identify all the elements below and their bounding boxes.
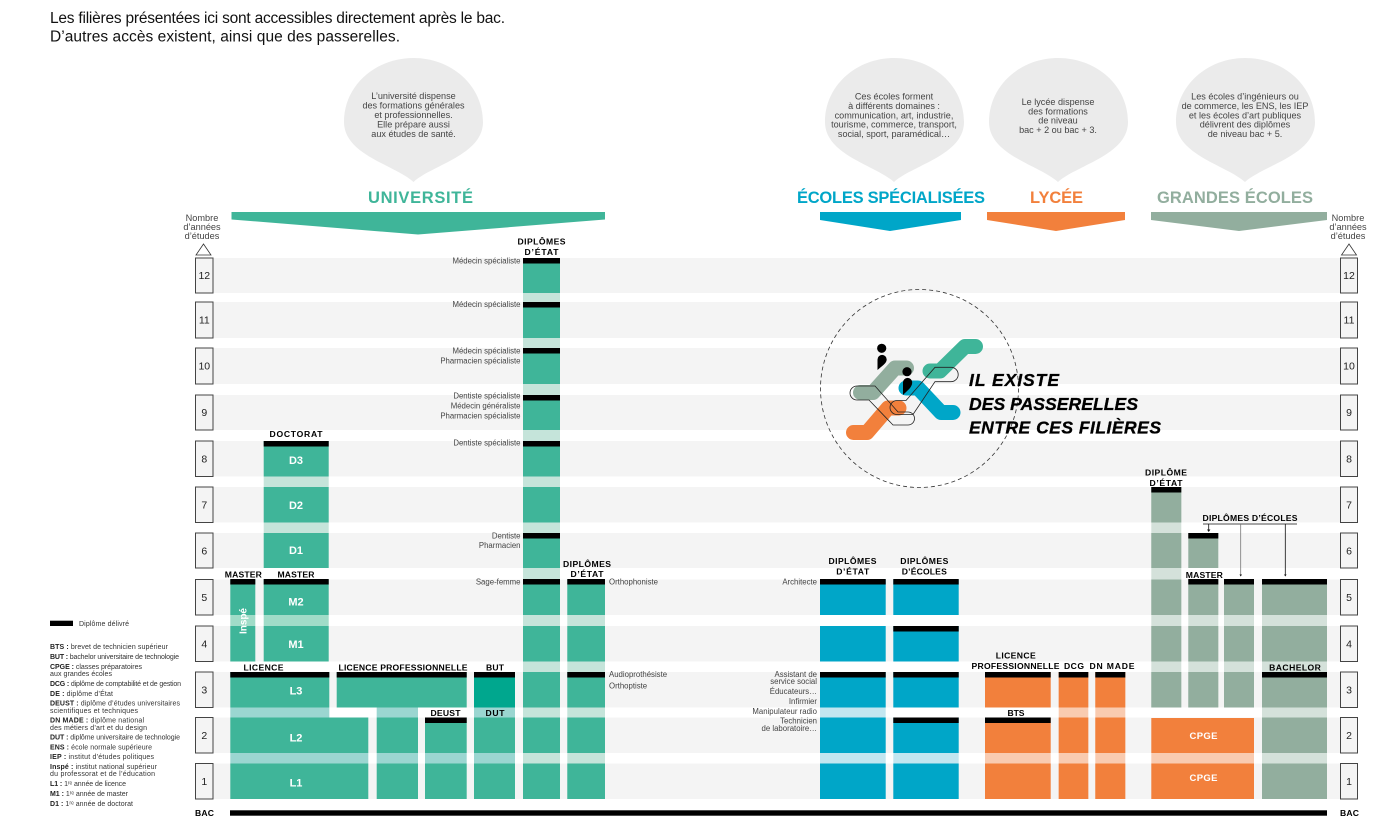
- heading: lycée: LYCÉE: [1030, 188, 1083, 207]
- bubble: université: [344, 58, 483, 182]
- column: diplômes d'État santé: Sage-femme: [476, 578, 520, 586]
- column: diplômes d'État santé: Pharmacien spécialiste: [440, 412, 520, 420]
- column: écoles spécialisées diplômes d'État: Éducateurs…: [770, 687, 817, 696]
- column: Inspé master: [225, 570, 263, 662]
- column: diplômes d'État paramédicaux: [563, 558, 667, 799]
- bubble: lycée: de niveau: [1038, 116, 1078, 126]
- bubble: écoles spécialisées: communication, art, industrie,: [835, 110, 953, 120]
- legend: aux grandes écoles: [50, 671, 112, 678]
- bubble: écoles spécialisées: à différents domaines :: [848, 101, 940, 111]
- left axis: number of years: 2: [201, 730, 207, 742]
- callout text: ENTRE CES FILIÈRES: [969, 416, 1161, 438]
- column: CPGE: CPGE: [1190, 731, 1218, 742]
- right axis: number of years: 9: [1346, 407, 1352, 419]
- column: master and doctorat: MASTER: [278, 570, 315, 580]
- column: diplômes d'État santé: Dentiste spécialiste: [453, 438, 520, 448]
- column: licence: L3: [290, 686, 302, 698]
- legend: DE : diplôme d’État: [50, 689, 113, 698]
- column: grandes écoles diplôme d'école: [1224, 579, 1254, 708]
- column: grandes écoles bachelor: [1262, 579, 1327, 799]
- legend: Inspé : institut national supérieur: [50, 764, 158, 771]
- column: master and doctorat: M2: [288, 596, 304, 608]
- column: BUT and DUT: DUT: [486, 708, 505, 718]
- heading: grandes écoles: GRANDES ÉCOLES: [1157, 188, 1313, 207]
- column: master and doctorat: M1: [288, 639, 304, 651]
- left axis: number of years: 1: [201, 776, 207, 788]
- column: lycée DN MADE: DN MADE: [1090, 661, 1135, 671]
- right axis: number of years: d’années: [1329, 222, 1367, 232]
- column: licence: LICENCE: [244, 662, 284, 672]
- bubble: grandes écoles: délivrent des diplômes: [1200, 120, 1291, 130]
- right axis: number of years: 7: [1346, 500, 1352, 512]
- column: DEUST: [425, 708, 467, 799]
- left axis: number of years: 6: [201, 546, 207, 558]
- legend: L1 : 1ʳᵉ année de licence: [50, 781, 126, 788]
- column: écoles spécialisées diplômes d'État: [752, 555, 886, 799]
- right axis: number of years: 12: [1343, 270, 1355, 282]
- legend: DEUST : diplôme d’études universitaires: [50, 700, 180, 708]
- column: grandes écoles master: [1186, 533, 1224, 708]
- column: master and doctorat: DOCTORAT: [270, 429, 323, 439]
- bubble: grandes écoles: et les écoles d’art publiques: [1189, 110, 1302, 120]
- column: diplômes d'État paramédicaux: Audioprothésiste: [609, 670, 667, 679]
- right axis: number of years: 10: [1343, 360, 1355, 372]
- column: lycée DCG: DCG: [1064, 661, 1084, 671]
- column: diplômes d'État santé: Médecin spécialiste: [452, 256, 520, 266]
- intro text: D’autres accès existent, ainsi que des passerelles.: [50, 28, 400, 46]
- column: écoles spécialisées diplômes d'État: de laboratoire…: [762, 724, 817, 733]
- legend: du professorat et de l’éducation: [50, 771, 155, 778]
- bubble: université: Elle prépare aussi: [377, 120, 450, 130]
- left axis: number of years: Nombre: [186, 213, 218, 223]
- bubble: écoles spécialisées: Ces écoles forment: [855, 92, 934, 102]
- column: licence: L2: [290, 733, 302, 745]
- column: écoles spécialisées diplômes d'écoles: DIPLÔMES: [900, 555, 949, 566]
- column: écoles spécialisées diplômes d'État: Technicien: [780, 716, 817, 726]
- right axis: number of years: [1329, 213, 1367, 799]
- legend: ENS : école normale supérieure: [50, 744, 152, 752]
- icon: crossing walkways: [850, 344, 976, 432]
- heading: grandes écoles: [1151, 188, 1327, 231]
- right axis: number of years: 1: [1346, 776, 1352, 788]
- column: diplômes d'État paramédicaux: D’ÉTAT: [570, 569, 604, 579]
- column: écoles spécialisées diplômes d'État: Manipulateur radio: [752, 707, 818, 716]
- legend: scientifiques et techniques: [50, 708, 138, 715]
- bubble: grandes écoles: de niveau bac + 5.: [1208, 129, 1282, 139]
- intro text: Les filières présentées ici sont accessibles directement après le bac.: [50, 10, 505, 27]
- legend: Diplôme délivré: [79, 621, 129, 628]
- column: BUT and DUT: BUT: [486, 662, 505, 672]
- column: licence professionnelle: [337, 662, 468, 799]
- column: grandes écoles master: MASTER: [1186, 570, 1224, 580]
- column: lycée BTS and licence professionnelle: BTS: [1008, 708, 1025, 718]
- BAC baseline: [195, 808, 1359, 818]
- callout: passerelles: [820, 290, 1161, 488]
- BAC baseline: BAC: [195, 808, 214, 818]
- column: diplômes d'État paramédicaux: Orthophoniste: [609, 578, 658, 586]
- heading: écoles spécialisées: ÉCOLES SPÉCIALISÉES: [797, 188, 985, 207]
- legend: BUT : bachelor universitaire de technologie: [50, 654, 179, 661]
- right axis: number of years: 2: [1346, 730, 1352, 742]
- legend: des métiers d’art et du design: [50, 725, 147, 732]
- right axis: number of years: 3: [1346, 684, 1352, 696]
- legend: CPGE : classes préparatoires: [50, 664, 142, 671]
- column: CPGE: CPGE: [1190, 773, 1218, 784]
- column: DEUST: DEUST: [430, 708, 461, 718]
- left axis: number of years: 3: [201, 684, 207, 696]
- bubble: grandes écoles: Les écoles d’ingénieurs ou: [1191, 92, 1299, 102]
- column: diplômes d'État santé: Médecin spécialiste: [452, 300, 520, 309]
- bubble: lycée: Le lycée dispense: [1022, 97, 1094, 107]
- BAC baseline: BAC: [1340, 808, 1359, 818]
- column: master and doctorat: D1: [289, 545, 303, 557]
- heading: lycée: [987, 188, 1125, 231]
- column: diplômes d'État santé: Dentiste spécialiste: [453, 392, 520, 400]
- left axis: number of years: 7: [201, 500, 207, 512]
- right axis: number of years: 8: [1346, 454, 1352, 466]
- column: CPGE: [1151, 718, 1254, 799]
- right axis: number of years: d’études: [1331, 231, 1366, 241]
- callout text: IL EXISTE: [969, 370, 1060, 390]
- left axis: number of years: [183, 213, 221, 799]
- right axis: number of years: Nombre: [1332, 213, 1364, 223]
- background year rows: [213, 258, 1341, 799]
- column: Inspé master: MASTER: [225, 570, 263, 580]
- bubble: lycée: [989, 58, 1128, 182]
- column: master and doctorat: [264, 429, 329, 662]
- bubble: université: des formations générales: [362, 100, 465, 110]
- column: grandes écoles bachelor: BACHELOR: [1269, 662, 1322, 672]
- column: lycée BTS and licence professionnelle: PROFESSIONNELLE: [972, 661, 1060, 671]
- callout text: [969, 370, 1161, 438]
- label: diplômes d'écoles with leader lines: [1202, 512, 1298, 576]
- column: diplômes d'État santé: Dentiste: [492, 532, 520, 540]
- legend: BTS : brevet de technicien supérieur: [50, 644, 169, 651]
- column: diplômes d'État santé: DIPLÔMES: [518, 236, 566, 246]
- heading: université: [232, 188, 605, 234]
- left axis: number of years: d’années: [183, 222, 221, 232]
- column: diplômes d'État paramédicaux: Orthoptiste: [609, 682, 647, 690]
- column: écoles spécialisées diplômes d'État: DIPLÔMES: [828, 555, 877, 566]
- column: grandes écoles diplôme d'État: DIPLÔME: [1145, 466, 1187, 478]
- left axis: number of years: 12: [198, 270, 210, 282]
- bubble: écoles spécialisées: [825, 58, 964, 182]
- column: lycée BTS and licence professionnelle: [972, 650, 1060, 799]
- column: diplômes d'État santé: Pharmacien spécialiste: [440, 356, 520, 366]
- heading: université: UNIVERSITÉ: [368, 188, 473, 207]
- legend: [50, 621, 181, 808]
- column: lycée DN MADE: [1090, 661, 1135, 799]
- left axis: number of years: d’études: [185, 231, 220, 241]
- bubble: écoles spécialisées: social, sport, paramédical…: [838, 129, 950, 139]
- legend: D1 : 1ʳᵉ année de doctorat: [50, 801, 133, 808]
- legend: DUT : diplôme universitaire de technologie: [50, 734, 180, 742]
- bubble: université: L’université dispense: [371, 91, 456, 101]
- left axis: number of years: 11: [199, 314, 210, 326]
- column: BUT and DUT: [474, 662, 515, 799]
- column: lycée DCG: [1059, 661, 1088, 799]
- left axis: number of years: 10: [198, 360, 210, 372]
- column: diplômes d'État santé: D’ÉTAT: [524, 247, 559, 257]
- column: écoles spécialisées diplômes d'État: D’ÉTAT: [836, 566, 870, 576]
- right axis: number of years: 5: [1346, 592, 1352, 604]
- legend: M1 : 1ʳᵉ année de master: [50, 791, 129, 798]
- bubble: université: et professionnelles.: [374, 110, 453, 120]
- column: licence: L1: [290, 777, 302, 789]
- column: lycée BTS and licence professionnelle: LICENCE: [996, 650, 1036, 660]
- bubble: grandes écoles: [1176, 58, 1315, 182]
- column: master and doctorat: D3: [289, 455, 303, 467]
- column: écoles spécialisées diplômes d'État: Assistant de: [775, 670, 817, 679]
- column: diplômes d'État santé: [440, 236, 566, 799]
- right axis: number of years: 11: [1344, 314, 1355, 326]
- column: écoles spécialisées diplômes d'État: Architecte: [782, 578, 817, 586]
- right axis: number of years: 4: [1346, 638, 1352, 650]
- left axis: number of years: 8: [201, 454, 207, 466]
- column: grandes écoles diplôme d'État: D’ÉTAT: [1150, 478, 1183, 488]
- column: Inspé master: Inspé: [238, 608, 250, 634]
- intro text: [50, 10, 505, 46]
- column: diplômes d'État santé: Médecin spécialiste: [452, 346, 520, 356]
- column: diplômes d'État santé: Pharmacien: [479, 541, 520, 550]
- column: licence professionnelle: LICENCE PROFESSIONNELLE: [338, 662, 468, 672]
- column: grandes écoles diplôme d'État: [1145, 466, 1187, 708]
- legend: DN MADE : diplôme national: [50, 718, 144, 724]
- column: master and doctorat: D2: [289, 500, 303, 512]
- callout text: DES PASSERELLES: [969, 394, 1138, 414]
- left axis: number of years: 9: [201, 407, 207, 419]
- bubble: grandes écoles: de commerce, les ENS, les IEP: [1182, 101, 1308, 111]
- bubble: écoles spécialisées: tourisme, commerce, transport,: [831, 120, 957, 130]
- heading: écoles spécialisées: [797, 188, 985, 231]
- label: diplômes d'écoles with leader lines: DIPLÔMES D’ÉCOLES: [1202, 512, 1298, 523]
- column: licence: [230, 662, 368, 799]
- bubble: lycée: des formations: [1028, 106, 1088, 116]
- legend: IEP : institut d’études politiques: [50, 754, 154, 761]
- column: écoles spécialisées diplômes d'État: Infirmier: [789, 697, 817, 706]
- legend: DCG : diplôme de comptabilité et de gestion: [50, 681, 181, 688]
- column: diplômes d'État santé: Médecin généraliste: [451, 402, 520, 410]
- left axis: number of years: 4: [201, 638, 207, 650]
- column: diplômes d'État paramédicaux: DIPLÔMES: [563, 558, 611, 569]
- column: écoles spécialisées diplômes d'écoles: D’ÉCOLES: [902, 566, 947, 576]
- column: écoles spécialisées diplômes d'État: service social: [770, 677, 817, 686]
- right axis: number of years: 6: [1346, 546, 1352, 558]
- column: écoles spécialisées diplômes d'écoles: [893, 555, 959, 799]
- bubble: lycée: bac + 2 ou bac + 3.: [1019, 125, 1097, 135]
- bubble: université: aux études de santé.: [371, 129, 456, 139]
- left axis: number of years: 5: [201, 592, 207, 604]
